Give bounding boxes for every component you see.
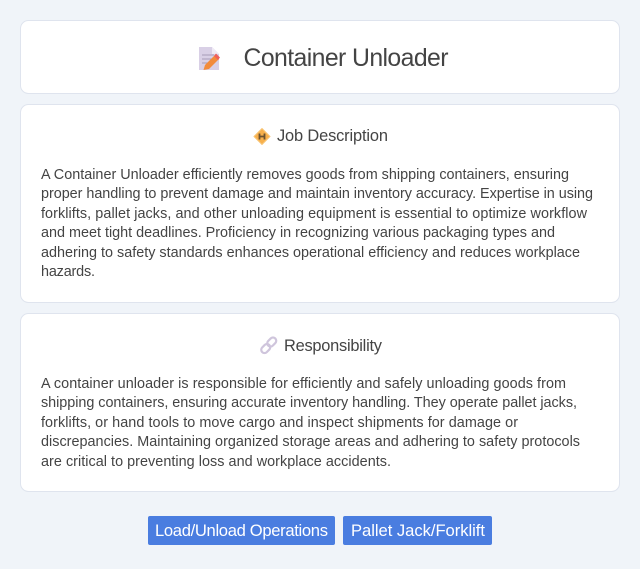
text block: responsibility: forklifts, or hand tools to move cargo and inspect shipments for damage or [41,415,518,431]
text block: responsibility: A container unloader is responsible for efficiently and safely unloading goods from [41,376,566,392]
panel: title card [20,20,620,94]
text block: job description: forklifts, pallet jacks, and other unloading equipment is essential to optimize workflow [41,206,588,222]
icon: diamond sign [254,128,270,144]
text block: responsibility: shipping containers, ensuring accurate inventory handling. They operate pallet jacks, [41,395,577,411]
text block: responsibility: discrepancies. Maintaining organized storage areas and adhering to safety protocols [41,434,580,450]
text block: job description: and meet tight deadlines. Proficiency in recognizing various packaging types and [41,225,555,241]
heading: job description: Job Description [277,127,388,145]
title: Container Unloader [244,45,448,72]
text block: job description: proper handling to prevent damage and maintain inventory accuracy. Expertise in using [41,186,593,202]
tag: load/unload operations [148,516,335,545]
text block: responsibility: are critical to preventing loss and workplace accidents. [41,454,391,470]
tag: pallet jack/forklift [343,516,492,545]
heading: responsibility: Responsibility [284,337,383,355]
text block: job description: adhering to safety standards enhances operational efficiency and reduces workplace [41,245,580,261]
icon: document with pencil [199,47,220,70]
text block: responsibility [41,376,580,470]
icon: chain link [260,336,278,354]
tag: pallet jack/forklift: Pallet Jack/Forklift [351,521,485,540]
text block: job description: A Container Unloader efficiently removes goods from shipping containers, ensuring [41,167,569,183]
text block: job description [41,167,593,280]
panel: responsibility [20,314,620,492]
panel: job description [20,104,620,302]
text block: job description: hazards. [41,264,95,280]
tag: load/unload operations: Load/Unload Operations [155,521,328,540]
